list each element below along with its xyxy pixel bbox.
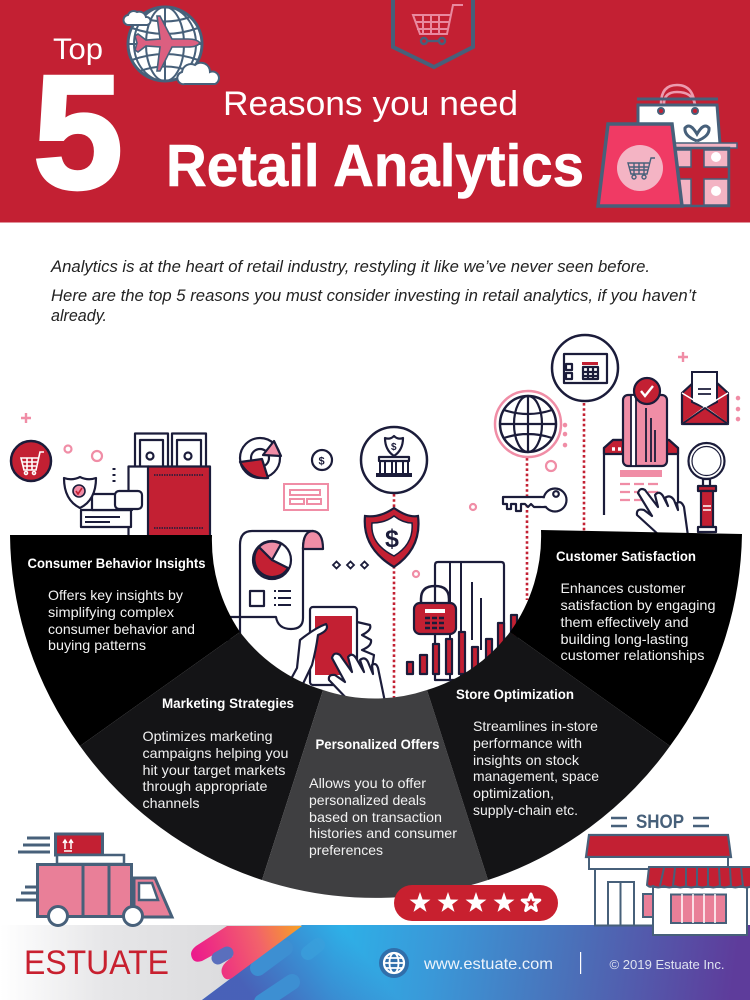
icon: report scroll with pie chart [222,531,323,640]
segment: customer satisfaction: Enhances customer [560,580,686,596]
segment: customer satisfaction: Customer Satisfaction [556,548,696,564]
header panel [0,0,750,223]
heading: big number 5: 5 [33,42,123,223]
panel: semicircle segments [10,530,742,898]
segment: personalized offers [262,690,488,898]
text block: introduction: Here are the top 5 reasons you must consider investing in retail analytics, if you haven’t [51,286,697,305]
icon: dollar coin [312,450,332,470]
segment: personalized offers: based on transaction [309,809,442,825]
segment: store optimization: Streamlines in-store [473,718,598,734]
segment: personalized offers: histories and consumer [309,825,457,841]
footer panel [0,925,750,1000]
heading: Reasons you need: Reasons you need [223,85,518,123]
logo: ESTUATE: ESTUATE [24,944,169,982]
segment: marketing strategies: campaigns helping you [142,745,288,761]
segment: store optimization: Store Optimization [456,686,574,702]
segment: customer satisfaction [510,530,742,746]
segment: consumer behavior insights: Consumer Behavior Insights [28,555,206,571]
segment: marketing strategies: through appropriate [142,778,268,794]
segment: consumer behavior insights: consumer behavior and [48,621,195,637]
icon: donut chart [240,438,281,478]
segment: marketing strategies: Optimizes marketing [142,728,272,744]
illustration: left retail icons [11,413,385,702]
segment: store optimization: optimization, [473,785,554,801]
text block: introduction: already. [51,306,107,325]
segment: store optimization: insights on stock [473,752,580,768]
heading: Top: Top [53,33,103,66]
icon: red cart circle [11,441,51,481]
icon: globe circle [495,391,565,471]
text: website: www.estuate.com [423,956,553,973]
icon: wallet with banknotes [128,434,210,538]
icon: cart tab [393,0,473,67]
segment: consumer behavior insights: simplifying complex [48,604,174,620]
segment: customer satisfaction: satisfaction by engaging [560,597,716,613]
text: copyright: © 2019 Estuate Inc. [610,958,724,972]
segment: marketing strategies [80,632,323,880]
icon: bank circle: $ [391,442,397,453]
icon: magnifier [688,443,724,532]
segment: marketing strategies: channels [142,795,200,811]
heading: Retail Analytics: Retail Analytics [166,133,584,199]
icon: envelope with letter [682,372,728,424]
icon: web globe [379,948,409,978]
icon: dollar shield [365,508,418,567]
illustration: right satisfaction icons [604,352,738,536]
icon: padlock [414,586,456,634]
segment: marketing strategies: hit your target markets [142,762,286,778]
segment: customer satisfaction: them effectively and [560,614,688,630]
segment: store optimization: management, space [473,768,599,784]
rating pill with stars [394,885,558,921]
icon: key [503,488,566,512]
segment: personalized offers: Personalized Offers [316,736,440,752]
icon: pink card [284,484,328,510]
chart: bars with card [407,562,517,680]
icon: globe with plane and clouds [123,7,219,84]
icon: delivery truck [16,834,172,926]
text block: introduction: Analytics is at the heart of retail industry, restyling it like we’ve never seen before. [50,257,650,276]
decorative diamonds row [333,562,368,568]
icon: card machine circle [552,335,618,401]
icon: receipt and pointing hand [604,378,688,536]
segment: store optimization [427,632,670,880]
icon: dollar coin: $ [318,456,325,468]
segment: consumer behavior insights [10,535,240,746]
icon: dollar shield: $ [385,525,399,553]
text block: introduction [50,257,697,325]
segment: consumer behavior insights: buying patterns [48,637,146,653]
segment: customer satisfaction: building long-lasting [560,631,688,647]
segment: store optimization: supply-chain etc. [473,802,578,818]
segment: store optimization: performance with [473,735,582,751]
text: SHOP sign: SHOP [636,812,684,833]
segment: consumer behavior insights: Offers key insights by [48,587,183,603]
icon: shop building [586,812,750,935]
segment: personalized offers: personalized deals [309,792,426,808]
segment: personalized offers: Allows you to offer [309,775,426,791]
segment: personalized offers: preferences [309,842,383,858]
icon: phone with hands [285,607,385,702]
segment: marketing strategies: Marketing Strategies [162,695,294,711]
icon: shopping bags and gift [598,85,737,206]
segment: customer satisfaction: customer relationships [560,647,704,663]
icon: shield with card [64,468,142,527]
illustration: dotted lines and central icons [361,335,618,698]
icon: bank circle [361,427,427,493]
